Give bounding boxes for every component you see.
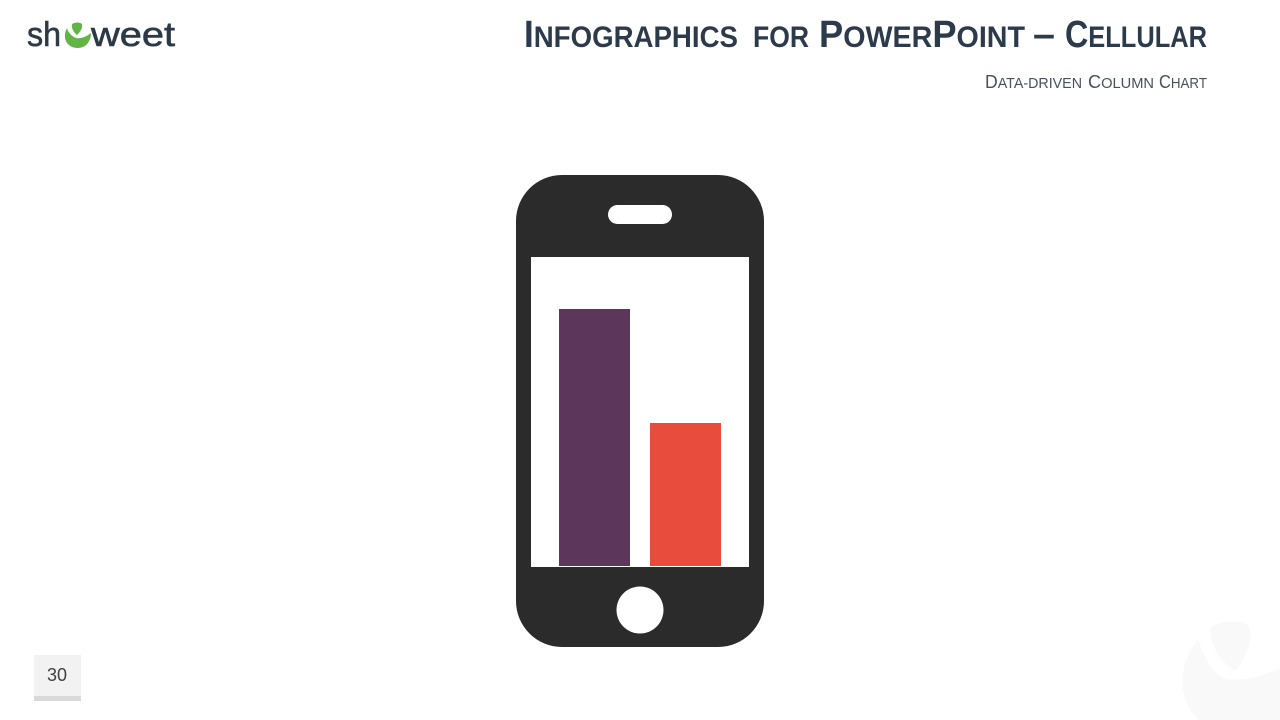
page number box [34, 655, 81, 701]
logo: showeet [27, 16, 176, 54]
watermark logo [1183, 622, 1280, 720]
phone column chart [516, 175, 764, 647]
title: FOR [753, 21, 809, 54]
title: INFOGRAPHICS [524, 14, 738, 56]
phone screen [531, 257, 749, 567]
subtitle: CHART [1159, 71, 1207, 92]
page number [34, 655, 81, 701]
phone home button [616, 586, 664, 634]
column: red [650, 423, 721, 566]
logo text: sh: sh [27, 16, 61, 54]
title: CELLULAR [1065, 14, 1207, 56]
title [524, 14, 1207, 56]
subtitle: COLUMN [1088, 71, 1154, 92]
column: purple [559, 309, 630, 566]
phone speaker [608, 205, 672, 224]
title: POWERPOINT [819, 14, 1025, 56]
page number text: 30 [47, 665, 67, 685]
phone body [516, 175, 764, 647]
subtitle: DATA-DRIVEN [985, 71, 1082, 92]
title: – [1033, 14, 1055, 56]
logo text: weet: weet [90, 16, 176, 54]
logo icon: green circle with drop [65, 22, 91, 48]
subtitle [985, 71, 1207, 92]
